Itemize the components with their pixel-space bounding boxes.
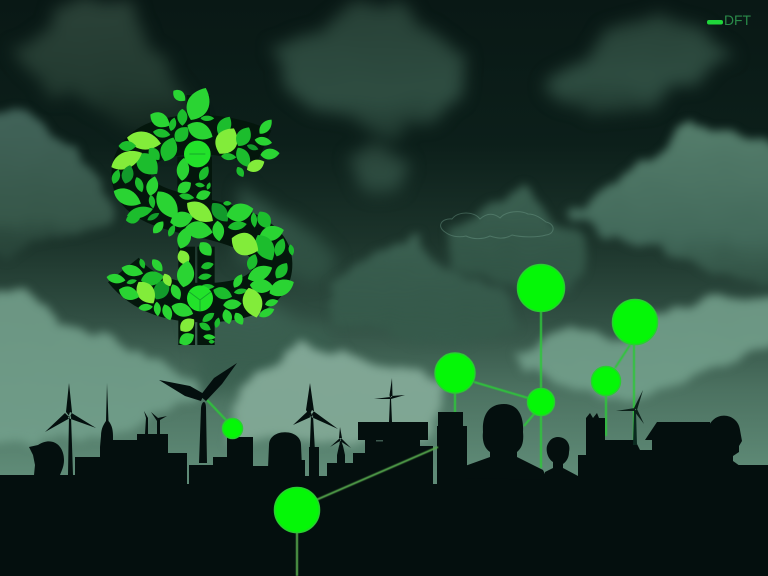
person: small bust — [545, 437, 578, 480]
skyline silhouette — [0, 383, 768, 576]
left buildings — [75, 383, 272, 476]
round leaf medallion top — [184, 141, 211, 167]
label: DFT watermark — [707, 12, 751, 28]
turbine large centre — [159, 363, 237, 463]
storm clouds — [0, 0, 768, 440]
person: centre head — [268, 432, 302, 468]
tall tower — [437, 412, 467, 476]
small turbines behind block — [144, 411, 167, 434]
person: right head — [706, 416, 742, 470]
ground — [0, 475, 768, 576]
data nodes — [222, 264, 658, 532]
faint cloud outline — [441, 212, 553, 239]
connector lines over skyline — [297, 447, 438, 576]
turbine far left — [45, 383, 96, 475]
small turbine mid — [330, 427, 351, 450]
label: DFT watermark: DFT — [724, 12, 751, 28]
small building highlight — [376, 440, 383, 442]
centre buildings — [255, 422, 433, 476]
right buildings — [578, 413, 710, 476]
connector lines over sky — [207, 310, 634, 468]
icon: dollar sign made of leaves — [106, 83, 297, 348]
roof turbine — [374, 378, 405, 422]
leaves — [106, 83, 297, 348]
round leaf medallion bottom — [187, 285, 213, 311]
person: large bust — [465, 404, 548, 480]
wind turbines — [45, 363, 644, 475]
person: left head — [29, 441, 64, 475]
dollar silhouette — [123, 95, 273, 345]
turbine right of head — [293, 383, 338, 470]
turbine right — [633, 411, 637, 445]
